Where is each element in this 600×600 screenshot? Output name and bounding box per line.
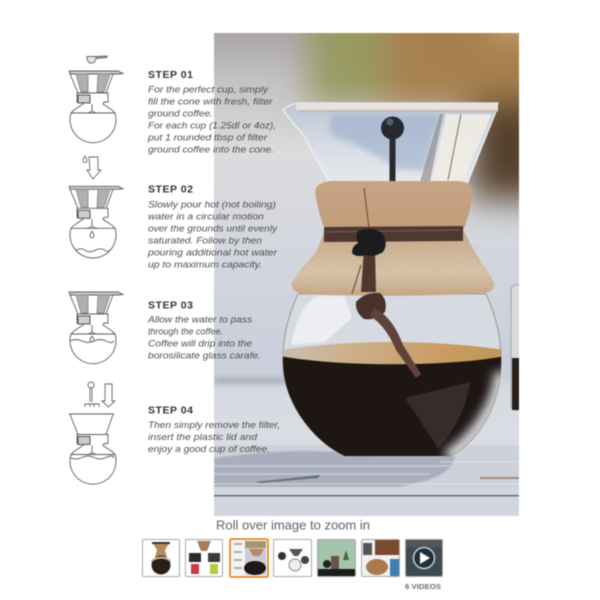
step 3 text: Allow the water to pass [147,315,252,326]
step 1 heading: STEP 01 [148,69,193,81]
step 2 text: pouring additional hot water [147,247,278,258]
cork collar [292,181,494,296]
thumbnail 6 [362,540,400,576]
table surface [214,445,519,516]
icon: carafe with filter, step 1 [69,71,123,143]
leather strap [324,226,463,378]
step 2 text: Slowly pour hot (not boiling) [148,199,276,210]
second carafe at right edge [510,284,520,411]
icon: carafe with lid, step 4 [69,414,116,484]
step 2 text: up to maximum capacity. [148,259,262,270]
step 3 text: Coffee will drip into the [148,339,252,350]
step 4 text: Then simply remove the filter, [148,420,280,431]
thumbnail 1 [142,540,180,576]
glass cone [283,103,498,184]
icon: carafe with filter, step 2 [69,186,123,258]
thumbnail 5 [318,540,356,576]
strap toggle bead [352,229,386,256]
thumbnail strip [142,539,442,577]
step 3 text [147,315,261,362]
step 3 heading: STEP 03 [148,299,193,311]
arrow: drop into carafe [83,156,101,179]
step 4 text: enjoy a good cup of coffee. [148,444,270,455]
icon: carafe with filter, step 3 [69,292,123,364]
icon: lid and down arrow [85,382,115,407]
step 4 heading: STEP 04 [148,404,193,416]
step 1 text: ground coffee. [148,109,213,120]
step 1 text [147,85,276,156]
step 2 text [147,199,278,270]
video count label: 6 VIDEOS [405,584,441,591]
step 2 text: over the grounds until evenly [148,223,278,234]
thumbnail 7 video [406,540,442,576]
step 1 text: fill the cone with fresh, filter [148,97,273,108]
step 1 text: For each cup (1.25dl or 4oz), [148,121,276,132]
step 2 text: saturated. Follow by then [148,235,262,246]
glass carafe globe [280,294,505,460]
step 3 text: through the coffee. [148,327,223,338]
step 2 heading: STEP 02 [148,184,193,196]
icon: scoop [87,56,107,63]
caption: roll over image: Roll over image to zoom in [216,518,370,532]
step 3 text: borosilicate glass carafe. [148,351,261,362]
step 1 text: For the perfect cup, simply [148,85,269,96]
thumbnail 4 [274,540,312,576]
step 4 text: insert the plastic lid and [148,432,258,443]
photo: coffee maker on table [213,32,520,516]
instructions column [147,69,280,455]
filter plunger ball and stem [381,116,404,188]
step 1 text: ground coffee into the cone. [148,145,274,156]
step 2 text: water in a circular motion [148,211,264,222]
thumbnail 2 [186,540,222,576]
thumbnail 3 selected [230,539,268,577]
step 4 text [148,420,280,455]
step 1 text: put 1 rounded tbsp of filter [147,133,268,144]
